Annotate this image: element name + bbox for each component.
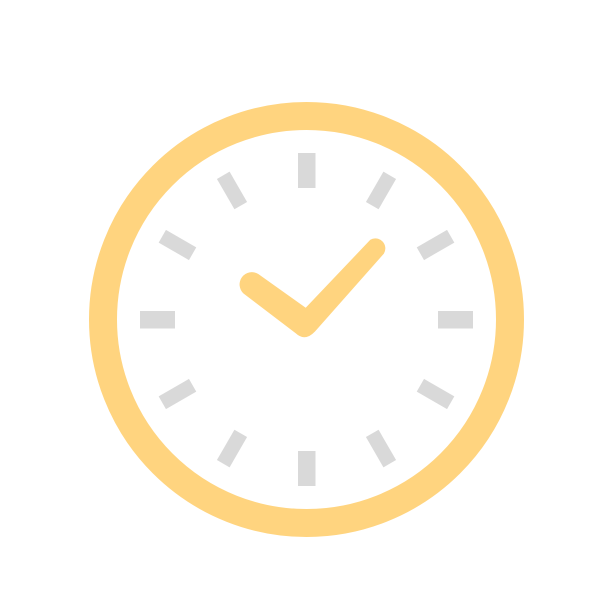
clock hands bbox=[240, 238, 385, 337]
clock face ring bbox=[103, 116, 510, 523]
hour tick marks bbox=[140, 153, 473, 486]
